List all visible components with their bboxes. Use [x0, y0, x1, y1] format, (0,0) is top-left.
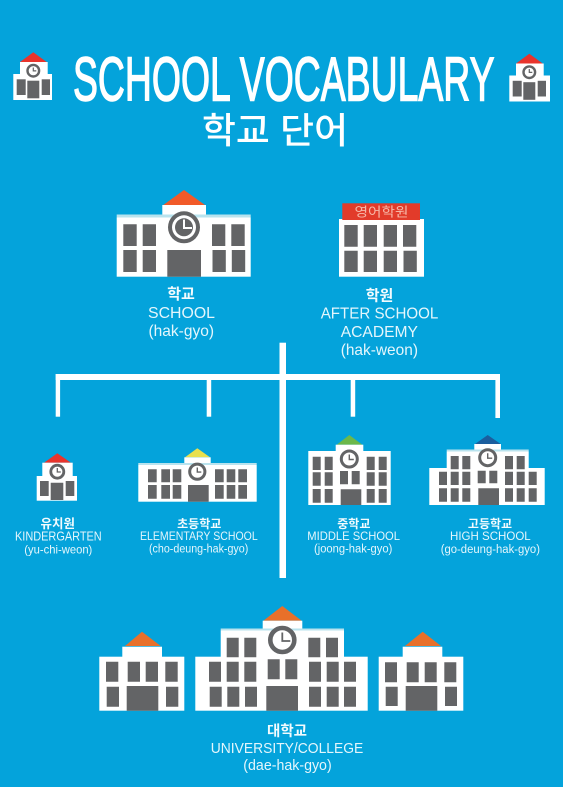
sign: 영어학원 [354, 202, 408, 220]
label: high school: (go-deung-hak-gyo) [441, 544, 540, 556]
label: university [211, 720, 363, 774]
label: kindergarten: KINDERGARTEN [15, 530, 102, 544]
label: after school academy: 학원 [366, 284, 393, 306]
label: high school: HIGH SCHOOL [450, 529, 531, 543]
building: school [117, 190, 251, 277]
label: elementary school: (cho-deung-hak-gyo) [149, 544, 248, 556]
label: school: SCHOOL [148, 305, 215, 322]
label: university: (dae-hak-gyo) [243, 757, 332, 774]
label: school: (hak-gyo) [148, 323, 214, 340]
building: university left wing [99, 632, 184, 711]
label: school [148, 283, 215, 340]
label: elementary school: ELEMENTARY SCHOOL [140, 529, 258, 543]
label: kindergarten: 유치원 [40, 513, 75, 532]
building: university main hall [195, 606, 368, 711]
label: after school academy: AFTER SCHOOL [321, 306, 438, 322]
label: middle school: MIDDLE SCHOOL [307, 529, 400, 543]
building: university right wing [379, 632, 463, 711]
building: kindergarten [37, 453, 77, 501]
label: after school academy: ACADEMY [341, 324, 418, 341]
tree connector lines [56, 343, 500, 578]
korean subtitle: 학교 단어 [202, 102, 348, 154]
label: high school: 고등학교 [468, 515, 512, 532]
label: after school academy: (hak-weon) [341, 342, 418, 359]
icon: small school right [509, 54, 550, 102]
label: middle school: (joong-hak-gyo) [314, 544, 392, 556]
label: university: UNIVERSITY/COLLEGE [211, 740, 363, 757]
label: kindergarten: (yu-chi-weon) [24, 542, 92, 556]
label: elementary school: 초등학교 [177, 515, 221, 532]
label: middle school [307, 515, 400, 556]
building: after school academy [339, 202, 424, 277]
building: middle school [308, 435, 391, 505]
building: high school [429, 435, 545, 505]
icon: small school left [13, 52, 52, 100]
label: university: 대학교 [267, 720, 307, 741]
label: high school [441, 515, 540, 556]
label: after school academy [321, 284, 438, 359]
label: school: 학교 [167, 283, 195, 304]
label: kindergarten [15, 513, 102, 556]
label: middle school: 중학교 [337, 515, 370, 532]
building: elementary school [138, 448, 257, 502]
label: elementary school [140, 515, 258, 556]
